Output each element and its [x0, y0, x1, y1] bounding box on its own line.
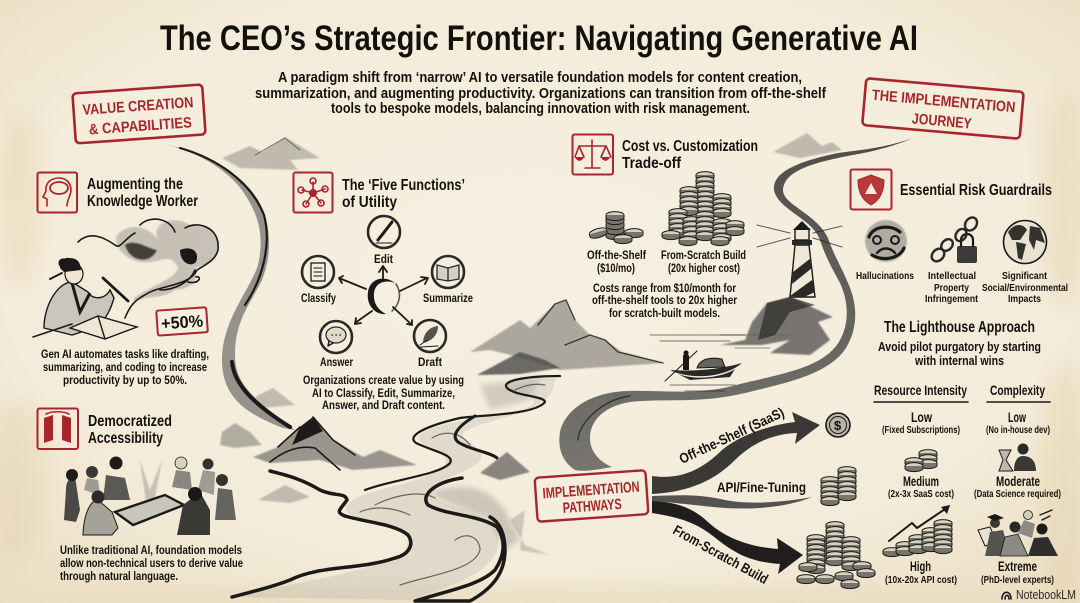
labels: cost tiers: From-Scratch Build	[661, 250, 746, 262]
heading: cost vs customization: Cost vs. Customization	[622, 138, 758, 155]
row: medium: Medium	[903, 474, 939, 489]
label: draft: Draft	[418, 357, 442, 369]
icon: medium coins	[905, 450, 937, 472]
illustration: group around glowing tablet	[64, 456, 236, 535]
icon: large coin pile	[797, 522, 875, 589]
icon: dollar coin: $	[834, 418, 842, 433]
text: lighthouse body	[878, 339, 1041, 368]
icon: summarize book	[432, 256, 464, 288]
labels: risks: Infringement	[925, 293, 978, 305]
text: augmenting body: productivity by up to 50%.	[63, 375, 187, 387]
labels: risks: Significant	[1002, 270, 1047, 282]
row: high: (PhD-level experts)	[981, 574, 1054, 586]
labels: risks: Impacts	[1008, 293, 1041, 305]
label: from-scratch: From-Scratch Build	[671, 522, 771, 587]
icon: dollar coin	[826, 413, 850, 437]
row: low	[882, 410, 1050, 436]
icon: draft quill	[414, 320, 446, 352]
icon: data scientist	[999, 444, 1036, 471]
right-hand mountains	[470, 300, 663, 370]
text: cost body: Costs range from $10/month for	[593, 283, 736, 295]
row: medium: Moderate	[996, 474, 1040, 489]
heading: five functions	[342, 177, 465, 211]
text: democratized body: through natural language.	[60, 571, 178, 583]
label: answer: Answer	[320, 357, 353, 369]
stamp: value creation: & CAPABILITIES	[88, 114, 192, 138]
row: low: (Fixed Subscriptions)	[882, 424, 960, 436]
labels: risks	[856, 270, 1068, 305]
icon: phd experts	[978, 510, 1058, 556]
heading: five functions: of Utility	[342, 194, 397, 211]
labels: cost tiers: Off-the-Shelf	[587, 250, 646, 262]
heading: augmenting	[87, 176, 198, 210]
icon: network	[294, 172, 332, 212]
subtitle: tools to bespoke models, balancing innovation with risk management.	[331, 101, 750, 117]
heading: cost vs customization	[622, 138, 758, 172]
icon: edit	[368, 216, 400, 248]
text: five functions body: Organizations create value by using	[303, 375, 464, 387]
row: high: High	[910, 559, 931, 574]
icon: medium coin stack	[821, 467, 856, 506]
river: right journey	[559, 138, 913, 471]
stamp: value creation: VALUE CREATION	[82, 94, 194, 119]
river: left curve	[165, 144, 295, 430]
text: lighthouse body: with internal wins	[914, 353, 1004, 368]
river: central winding	[232, 376, 560, 601]
text: augmenting body	[41, 349, 209, 387]
illustration: lighthouse on cliff	[720, 221, 842, 355]
stamp: implementation journey: JOURNEY	[911, 110, 972, 133]
heading: five functions: The ‘Five Functions’	[342, 177, 465, 194]
icon: scales	[572, 134, 613, 174]
subtitle: A paradigm shift from ‘narrow’ AI to versatile foundation models for content creation,	[278, 70, 802, 86]
icon: answer bubble	[320, 321, 352, 353]
row: high	[885, 559, 1054, 586]
illustration: ink smoke	[78, 219, 219, 318]
stamp: implementation pathways: PATHWAYS	[562, 496, 622, 517]
icon: shield	[850, 170, 892, 210]
callout: +50%: +50%	[160, 311, 204, 333]
text: augmenting body: summarizing, and coding to increase	[43, 362, 207, 374]
icon: broken chain and lock	[929, 215, 980, 264]
heading: democratized: Democratized	[88, 413, 172, 430]
text: cost body: off-the-shelf tools to 20x higher	[592, 295, 737, 307]
labels: risks: Property	[934, 282, 969, 294]
stamp: implementation journey: THE IMPLEMENTATION	[871, 87, 1016, 116]
label: off-the-shelf: Off-the-Shelf (SaaS)	[677, 404, 787, 467]
labels: risks: Intellectual	[928, 270, 976, 282]
icon: hallucination swirl	[865, 220, 907, 262]
text: cost body	[592, 283, 737, 320]
label: classify: Classify	[301, 293, 336, 305]
text: cost body: for scratch-built models.	[609, 308, 720, 320]
row: high: Extreme	[998, 559, 1037, 574]
callout: +50%	[156, 307, 208, 336]
labels: cost tiers: ($10/mo)	[597, 263, 635, 275]
central mountain	[253, 417, 417, 470]
stamp: implementation pathways: IMPLEMENTATION	[542, 479, 640, 502]
stamp: implementation journey	[862, 78, 1024, 139]
illustration: boat	[650, 335, 745, 391]
row: medium: (2x-3x SaaS cost)	[888, 488, 954, 500]
text: five functions body: Answer, and Draft content.	[322, 400, 445, 412]
row: low: Low	[911, 410, 932, 425]
subtitle: summarization, and augmenting productivity. Organizations can transition from off-the-shelf	[255, 86, 826, 102]
text: lighthouse body: Avoid pilot purgatory by starting	[878, 339, 1041, 354]
table headers: resource intensity and complexity: Resource Intensity	[874, 382, 967, 398]
stamp: implementation pathways	[535, 470, 648, 522]
diagram: five functions hub	[301, 216, 473, 369]
icon: classify scroll	[302, 256, 334, 288]
title: The CEO’s Strategic Frontier: Navigating Generative AI	[160, 19, 918, 58]
ink landscape: mountains	[220, 133, 842, 555]
row: medium	[888, 474, 1061, 500]
stamp: value creation	[72, 84, 206, 143]
illustration: scribe	[33, 258, 137, 339]
text: five functions body	[303, 375, 464, 412]
heading: cost vs customization: Trade-off	[622, 155, 682, 172]
icon: brain head	[38, 172, 77, 212]
icon: rising coins chart	[883, 505, 952, 557]
label: edit: Edit	[374, 254, 393, 266]
arrow: off-the-shelf	[652, 412, 820, 494]
heading: lighthouse approach: The Lighthouse Approach	[884, 319, 1035, 336]
labels: cost tiers: (20x higher cost)	[668, 263, 740, 275]
text: democratized body: Unlike traditional AI, foundation models	[60, 545, 242, 557]
text: augmenting body: Gen AI automates tasks like drafting,	[41, 349, 209, 361]
labels: cost tiers	[587, 250, 746, 275]
text: democratized body: allow non-technical users to derive value	[60, 558, 243, 570]
heading: augmenting: Knowledge Worker	[87, 193, 198, 210]
heading: democratized	[88, 413, 172, 447]
heading: augmenting: Augmenting the	[87, 176, 183, 193]
text: five functions body: AI to Classify, Edit, Summarize,	[312, 388, 455, 400]
arrow: from-scratch	[652, 501, 803, 574]
text: democratized body	[60, 545, 243, 583]
table headers: resource intensity and complexity	[874, 382, 1050, 402]
label: api fine-tuning: API/Fine-Tuning	[717, 479, 806, 495]
illustration: small coin pile	[588, 212, 643, 244]
icon: globe	[1004, 220, 1046, 264]
row: low: Low	[1008, 410, 1026, 425]
heading: democratized: Accessibility	[88, 430, 163, 447]
row: high: (10x-20x API cost)	[885, 574, 957, 586]
labels: risks: Hallucinations	[856, 270, 914, 282]
row: low: (No in-house dev)	[986, 424, 1050, 436]
subtitle	[255, 70, 826, 117]
illustration: big coin pile	[662, 172, 744, 246]
arrow: api fine-tuning	[652, 495, 812, 509]
icon: open doors	[38, 408, 78, 449]
hub: enso circle	[368, 279, 395, 314]
label: summarize: Summarize	[423, 293, 473, 305]
table headers: resource intensity and complexity: Complexity	[990, 382, 1045, 398]
arrows	[339, 266, 428, 325]
